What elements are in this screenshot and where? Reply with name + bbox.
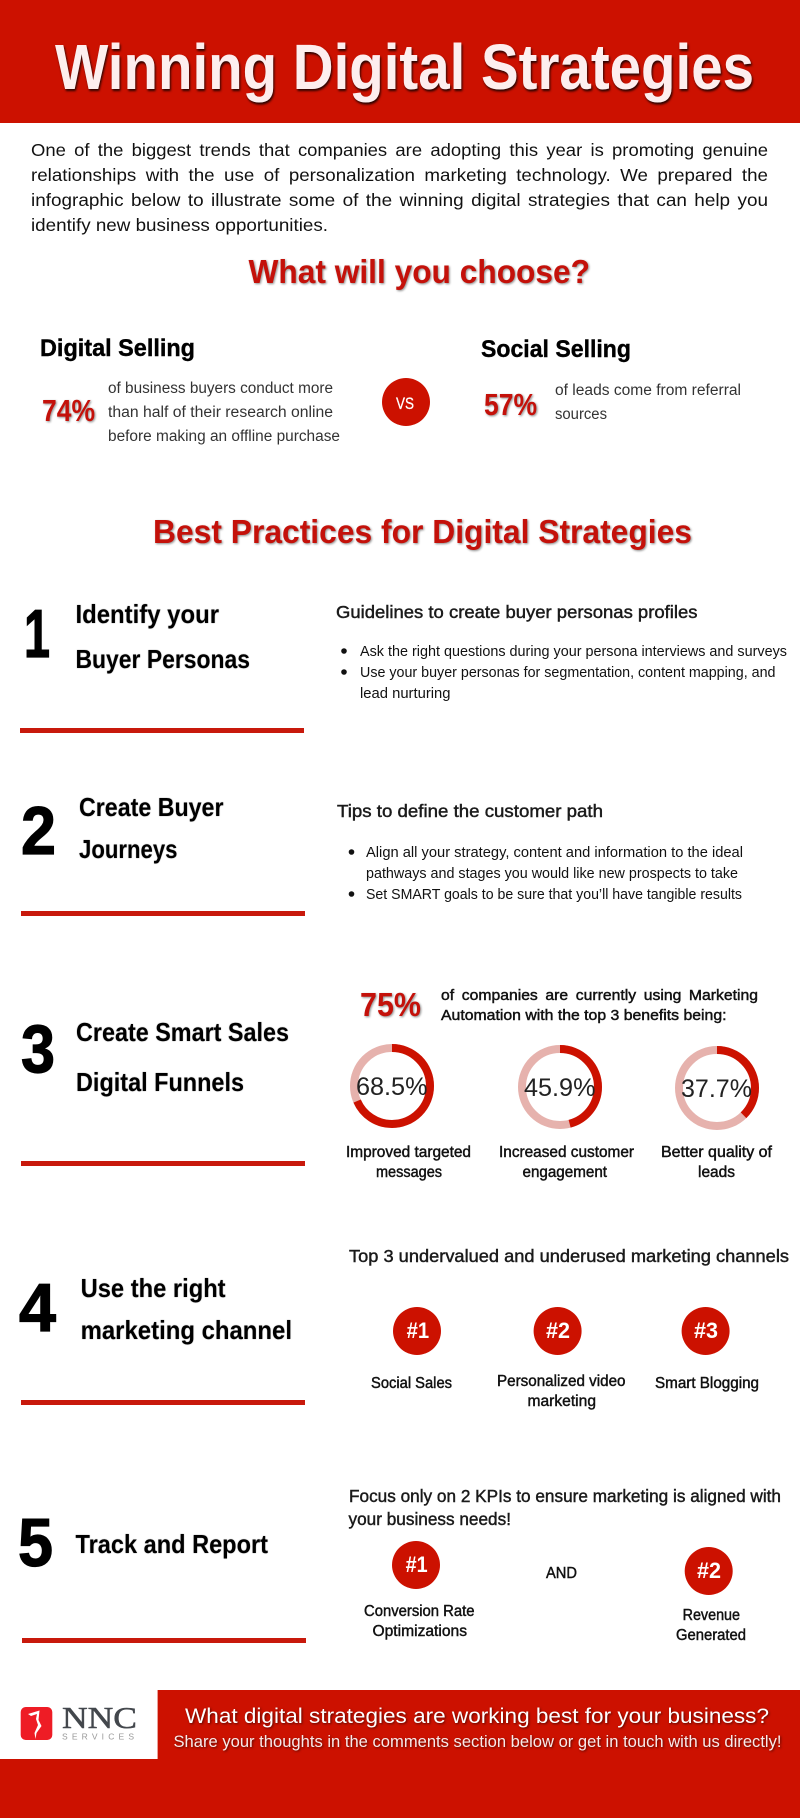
donut: 37.7%: 37.7% [681,1075,752,1103]
badge #1: #1 [407,1318,429,1343]
panel: step 4 [19,1246,789,1410]
label: improved targeted messages: Improved targeted [346,1144,471,1161]
step number 1: 1 [24,596,50,672]
automation text: Automation with the top 3 benefits being: [441,1008,726,1024]
social selling description: of leads come from referral [555,382,741,399]
logo: NNC Services [21,1700,137,1742]
social selling heading: Social Selling [481,336,631,363]
step 1 bullet list: Ask the right questions during your persona interviews and surveys [360,644,787,660]
digital selling heading: Digital Selling [40,335,195,362]
badge #2: #2 [546,1318,570,1343]
step 2 bullet list: pathways and stages you would like new prospects to take [366,866,738,882]
step 3 title [76,1017,289,1097]
footer call to action: Share your thoughts in the comments section below or get in touch with us directly! [174,1732,782,1751]
label: better quality of leads: Better quality of [661,1144,773,1161]
step 4 title [81,1273,292,1345]
kpi badge #2 [685,1547,733,1595]
step 1 title: Buyer Personas [76,644,250,674]
panel: step 3 [21,987,773,1181]
step 1 bullet list: lead nurturing [360,686,450,702]
and label: AND [546,1565,577,1582]
digital selling description: than half of their research online [108,404,333,421]
label: revenue generated: Generated [676,1627,746,1644]
badge #2 [534,1307,582,1355]
step 3 title: Create Smart Sales [76,1017,289,1047]
intro paragraph: relationships with the use of personalization marketing technology. We prepared the [31,165,768,185]
heading: what will you choose: What will you choose? [248,254,590,291]
heading: best practices: Best Practices for Digital Strategies [153,514,692,551]
donut: 68.5% [354,1048,430,1124]
step number 2: 2 [21,793,56,869]
step 1 bullet list: Use your buyer personas for segmentation, content mapping, and [360,665,776,681]
label: improved targeted messages [346,1144,471,1181]
digital selling description: of business buyers conduct more [108,380,333,397]
step 2 title: Create Buyer [79,792,224,822]
badge #1 [393,1307,441,1355]
kpi badge #1 [392,1541,440,1589]
donut: 37.7% [679,1050,755,1126]
stat: 75%: 75% [360,987,421,1024]
kpi badge #2: #2 [697,1558,721,1583]
label: smart blogging: Smart Blogging [655,1375,759,1392]
label: increased customer engagement [499,1144,634,1181]
step 4 title: Use the right [81,1273,226,1303]
step 2 bullet list [349,845,743,903]
badge #3 [682,1307,730,1355]
label: conversion rate optimizations [364,1603,474,1640]
stat: 74%: 74% [42,393,95,428]
label: better quality of leads: leads [698,1164,735,1181]
footer [0,1690,800,1818]
step 2 bullet list: Set SMART goals to be sure that you’ll have tangible results [366,887,742,903]
automation text [441,988,758,1024]
panel: digital selling [40,335,340,445]
donut: 45.9%: 45.9% [524,1074,596,1102]
intro paragraph [31,140,768,235]
label: increased customer engagement: engagement [522,1164,608,1181]
label: personalized video marketing: Personalized video [497,1373,626,1390]
step 2 title: Journeys [79,834,178,864]
digital selling description: before making an offline purchase [108,428,340,445]
label: personalized video marketing [497,1373,626,1410]
vs badge [382,378,430,426]
stat: 57%: 57% [484,387,537,422]
kpi badge #1: #1 [406,1552,428,1577]
label: revenue generated: Revenue [683,1607,740,1624]
badge #3: #3 [694,1318,718,1343]
label: conversion rate optimizations: Optimizations [372,1623,467,1640]
label: better quality of leads [661,1144,773,1181]
label: personalized video marketing: marketing [528,1393,596,1410]
label: increased customer engagement: Increased customer [499,1144,634,1161]
step number 3: 3 [21,1011,55,1087]
logo: NNC Services: NNC [62,1700,137,1735]
step number 5: 5 [18,1505,53,1581]
label: improved targeted messages: messages [376,1164,442,1181]
step 5 heading: your business needs! [348,1509,511,1529]
intro paragraph: One of the biggest trends that companies are adopting this year is promoting genuine [31,140,768,160]
step 3 title: Digital Funnels [76,1067,244,1097]
label: conversion rate optimizations: Conversion Rate [364,1603,474,1620]
social selling description [555,382,741,423]
step 1 title: Identify your [76,599,219,629]
automation text: of companies are currently using Marketing [441,988,758,1004]
step 2 bullet list: Align all your strategy, content and information to the ideal [366,845,743,861]
step 2 title [79,792,224,864]
step 4 title: marketing channel [81,1315,292,1345]
step 1 bullet list [341,644,787,702]
label: social sales: Social Sales [371,1375,452,1392]
step 5 heading [348,1486,781,1529]
donut: 68.5%: 68.5% [356,1073,428,1101]
step number 4: 4 [19,1270,56,1346]
social selling description: sources [555,406,607,423]
step 4 heading: Top 3 undervalued and underused marketing channels [349,1246,789,1266]
panel: step 5 [18,1486,781,1644]
footer question: What digital strategies are working best for your business? [185,1705,769,1728]
step 5 heading: Focus only on 2 KPIs to ensure marketing is aligned with [349,1486,781,1506]
donut: 45.9% [522,1049,598,1125]
panel: social selling [481,336,741,423]
digital selling description [108,380,340,445]
step 2 tips heading: Tips to define the customer path [337,801,603,821]
step 1 guidelines heading: Guidelines to create buyer personas profiles [336,602,698,622]
label: revenue generated [676,1607,746,1644]
header banner [0,0,800,123]
icon: logo mark [21,1707,52,1740]
step 1 title [76,599,250,674]
intro paragraph: infographic below to illustrate some of the winning digital strategies that can help you [31,190,768,210]
panel: step 2 [21,792,743,916]
vs badge: VS [396,394,414,413]
panel: step 1 [20,596,787,733]
intro paragraph: identify new business opportunities. [31,215,328,235]
step 5 title: Track and Report [76,1529,268,1559]
logo: NNC Services: SERVICES [62,1732,134,1742]
